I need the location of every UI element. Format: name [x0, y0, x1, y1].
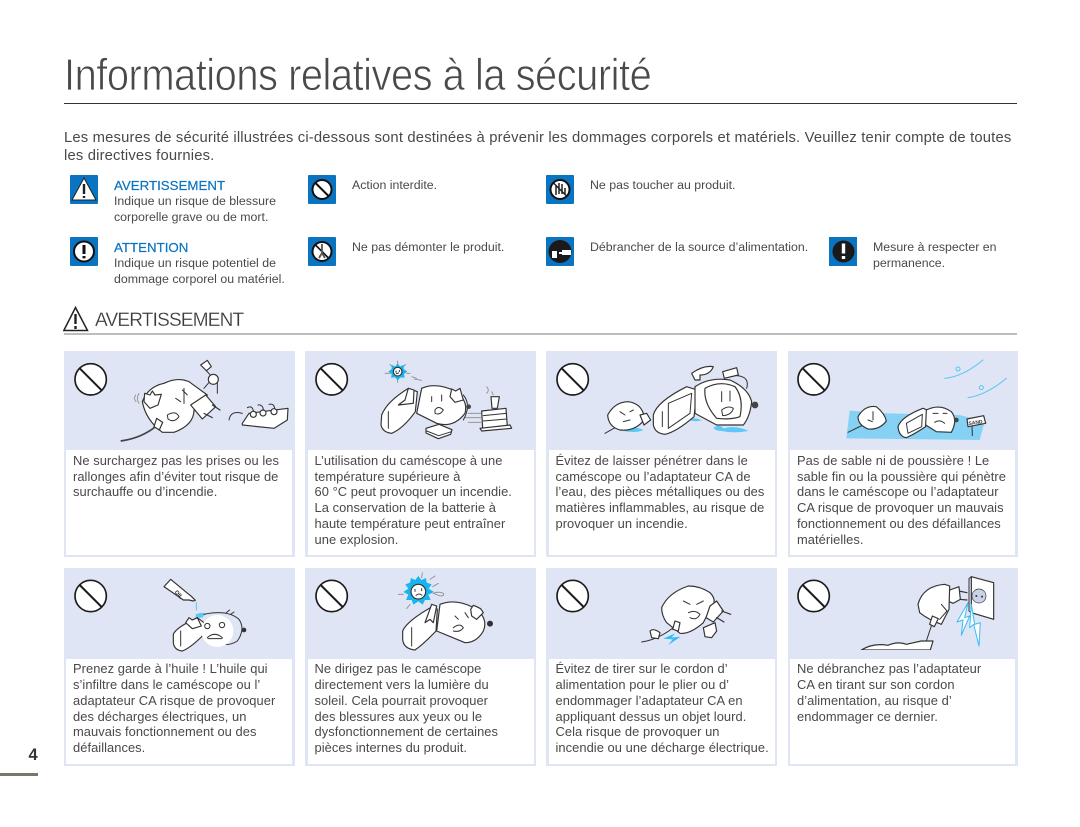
illustration: huile sur le caméscope [74, 578, 246, 652]
legend: avertissement: AVERTISSEMENT [114, 178, 225, 193]
icon: débrancher [546, 237, 574, 266]
text: s’infiltre dans le caméscope ou l’ [73, 677, 260, 692]
text: des blessures aux yeux ou le [314, 709, 482, 724]
text: Cela risque de provoquer un [556, 724, 720, 739]
text: défaillances. [73, 740, 145, 755]
text: Ne surchargez pas les prises ou les [73, 453, 279, 468]
illustration: main tirant le cordon [797, 576, 994, 650]
text: Ne débranchez pas l’adaptateur [797, 661, 981, 676]
section heading: avertissement [63, 306, 1017, 335]
legend: avertissement [114, 178, 276, 224]
text: dans le caméscope ou l’adaptateur [797, 484, 999, 499]
text: CA en tirant sur son cordon [797, 677, 955, 692]
text: température supérieure à [314, 469, 460, 484]
text: pièces internes du produit. [314, 740, 467, 755]
illustration: adaptateur et multiprise [74, 360, 289, 442]
text: incendie ou une décharge électrique. [556, 740, 769, 755]
text: 60 °C peut provoquer un incendie. [314, 484, 512, 499]
text: endommager l’adaptateur CA en [556, 693, 743, 708]
legend: avertissement: Indique un risque de blessure [114, 194, 276, 208]
text [66, 450, 292, 555]
panel: cordon d'alimentation [546, 568, 777, 766]
text: l’eau, des pièces métalliques ou des [556, 484, 764, 499]
illustration: caméscope au soleil [315, 572, 493, 651]
text [548, 658, 774, 764]
legend: mesure à respecter [873, 240, 996, 270]
text: appliquant dessus un objet lourd. [556, 709, 746, 724]
legend: avertissement: corporelle grave ou de mort. [114, 210, 268, 224]
icon: mesure à respecter [829, 237, 857, 266]
text: endommager ce dernier. [797, 709, 938, 724]
text: matières inflammables, au risque de [556, 500, 764, 515]
text: CA risque de provoquer un mauvais [797, 500, 1004, 515]
text: sable fin ou la poussière qui pénètre [797, 469, 1006, 484]
text: Ne dirigez pas le caméscope [314, 661, 481, 676]
text: caméscope ou l’adaptateur CA de [556, 469, 751, 484]
text: surchauffe ou d’incendie. [73, 484, 217, 499]
legend: débrancher: Débrancher de la source d’alimentation. [590, 240, 808, 254]
text: d’alimentation, au risque d’ [797, 693, 952, 708]
illustration: caméscope sur le sable [797, 360, 1007, 440]
text: directement vers la lumière du [314, 677, 489, 692]
icon: ne pas démonter [308, 237, 336, 266]
intro paragraph [64, 130, 1011, 164]
legend: ne pas toucher: Ne pas toucher au produit. [590, 178, 735, 192]
legend: mesure à respecter: Mesure à respecter en [873, 240, 996, 254]
panel: surcharge des prises [64, 351, 294, 557]
text: une explosion. [314, 532, 398, 547]
text [548, 450, 774, 555]
text: matérielles. [797, 532, 864, 547]
icon: ne pas toucher [546, 175, 574, 204]
legend: attention: dommage corporel ou matériel. [114, 272, 285, 286]
panel: huile [64, 568, 294, 766]
text: La conservation de la batterie à [314, 500, 496, 515]
intro paragraph: Les mesures de sécurité illustrées ci-dessous sont destinées à prévenir les dommages corporels et matériels. Veuillez tenir compte de toutes [64, 130, 1011, 146]
legend: attention: ATTENTION [114, 240, 188, 255]
illustration: caméscope mouillé [556, 362, 758, 435]
text: Évitez de laisser pénétrer dans le [556, 453, 748, 468]
legend: ne pas démonter: Ne pas démonter le produit. [352, 240, 504, 254]
text [308, 658, 534, 764]
text: Pas de sable ni de poussière ! Le [797, 453, 989, 468]
panel: liquides et pièces métalliques [546, 351, 777, 557]
title rule [64, 103, 1017, 104]
text: L’utilisation du caméscope à une [314, 453, 502, 468]
legend: attention [114, 240, 285, 286]
text [308, 450, 534, 555]
icon: attention [70, 237, 98, 266]
text: Évitez de tirer sur le cordon d’ [556, 661, 728, 676]
text: alimentation pour le plier ou d’ [556, 677, 729, 692]
text: dysfonctionnement de certaines [314, 724, 498, 739]
illustration: huile sur le caméscope: OIL [172, 589, 183, 600]
text [790, 450, 1015, 555]
text: haute température peut entraîner [314, 516, 505, 531]
illustration: cordon plié [556, 580, 732, 645]
text: provoquer un incendie. [556, 516, 688, 531]
text: fonctionnement ou des défaillances [797, 516, 1001, 531]
page marker bar [0, 773, 38, 776]
text: mauvais fonctionnement ou des [73, 724, 256, 739]
illustration: caméscope sur le sable: SAND [968, 419, 983, 427]
legend: action interdite: Action interdite. [352, 178, 437, 192]
intro paragraph: les directives fournies. [64, 148, 214, 164]
legend: mesure à respecter: permanence. [873, 256, 945, 270]
panel: sable et poussière [788, 351, 1018, 557]
panel: débranchement [788, 568, 1018, 766]
legend: attention: Indique un risque potentiel de [114, 256, 276, 270]
text: Prenez garde à l’huile ! L’huile qui [73, 661, 268, 676]
text: des décharges électriques, un [73, 709, 246, 724]
title: Informations relatives à la sécurité [64, 51, 651, 100]
text: adaptateur CA risque de provoquer [73, 693, 275, 708]
section heading: avertissement: AVERTISSEMENT [95, 310, 243, 331]
panel: température élevée [305, 351, 536, 557]
text: soleil. Cela pourrait provoquer [314, 693, 488, 708]
icon: action interdite [308, 175, 336, 204]
illustration: caméscope et chaleur [315, 360, 512, 440]
text: rallonges afin d’éviter tout risque de [73, 469, 278, 484]
page number: 4 [28, 746, 38, 764]
text [66, 658, 292, 764]
text [790, 658, 1015, 764]
panel: lumière du soleil [305, 568, 536, 766]
icon: warning triangle [70, 175, 98, 204]
